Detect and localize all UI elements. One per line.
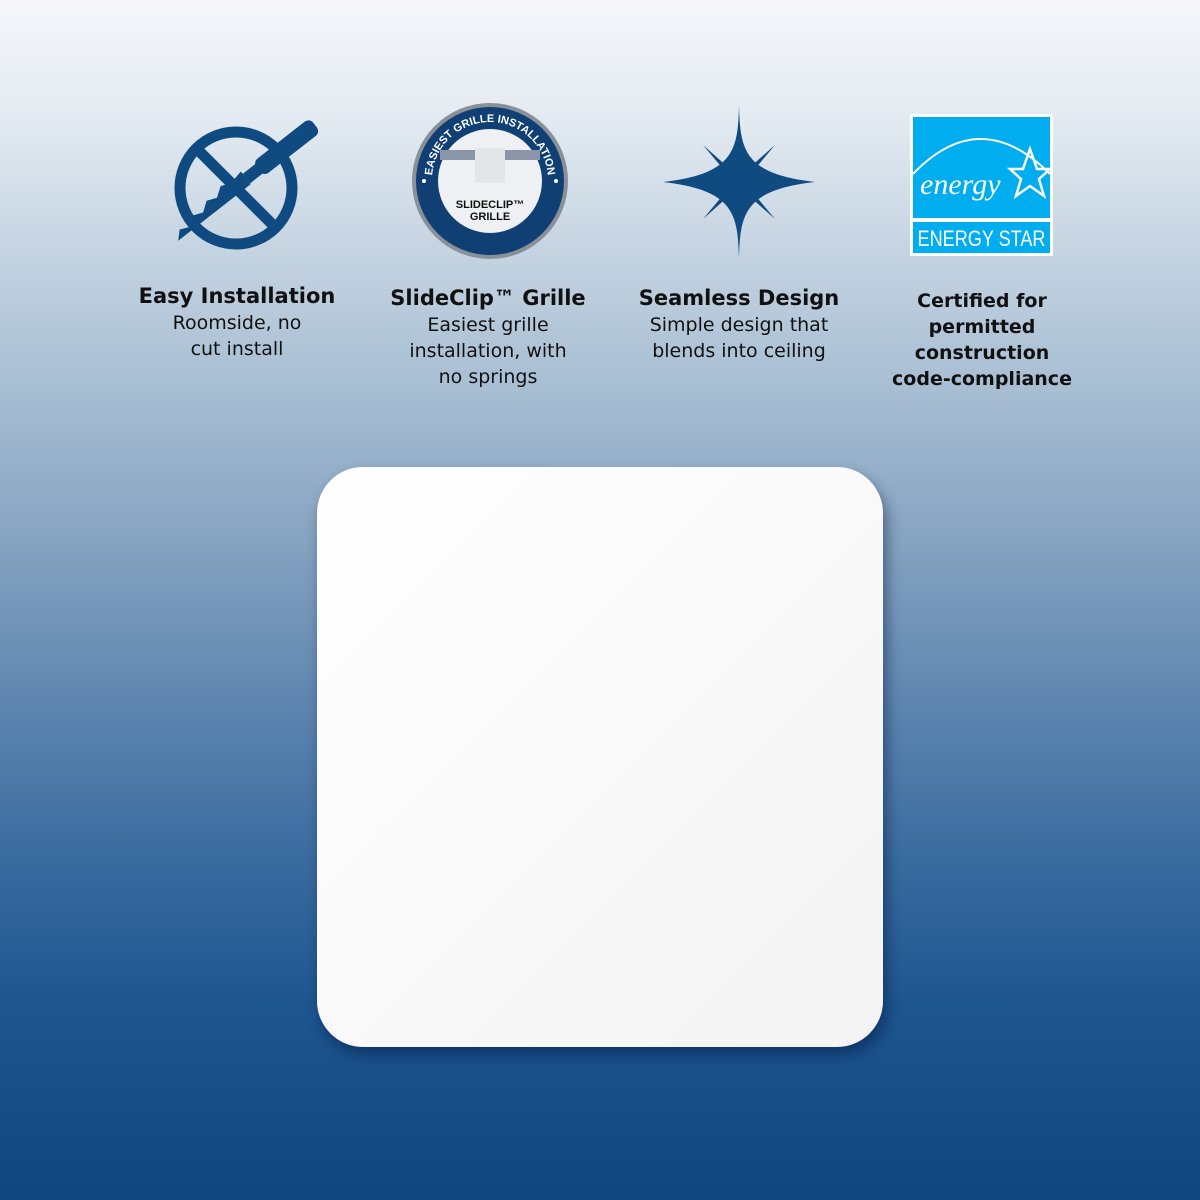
text: easy installation: Roomside, no (173, 312, 301, 334)
text: certified: permitted (929, 316, 1035, 338)
icon: slideclip badge (412, 103, 568, 259)
text: certified: code-compliance (892, 368, 1072, 390)
text: slideclip grille: SlideClip™ Grille (390, 286, 586, 310)
icon: sparkle star (663, 106, 815, 258)
text: slideclip grille: Easiest grille (427, 314, 549, 336)
text: easy installation: cut install (191, 338, 283, 360)
text: seamless design (639, 286, 839, 362)
icon: slideclip badge: EASIEST GRILLE INSTALLATION (424, 114, 556, 175)
icon: slideclip badge: GRILLE (470, 211, 510, 223)
text: seamless design: blends into ceiling (652, 340, 826, 362)
text: slideclip grille (390, 286, 586, 388)
text: easy installation (139, 284, 335, 360)
product: white panel (317, 467, 883, 1047)
text: seamless design: Simple design that (650, 314, 828, 336)
text: certified: Certified for (917, 290, 1047, 312)
text: slideclip grille: installation, with (409, 340, 567, 362)
icon: no saw (174, 120, 318, 250)
icon: energy star logo: energy (920, 168, 1001, 201)
icon: energy star logo (910, 114, 1053, 256)
icon: slideclip badge: SLIDECLIP™ (456, 199, 524, 211)
text: easy installation: Easy Installation (139, 284, 335, 308)
text: certified (892, 290, 1072, 390)
text: certified: construction (915, 342, 1049, 364)
text: seamless design: Seamless Design (639, 286, 839, 310)
text: slideclip grille: no springs (439, 366, 537, 388)
